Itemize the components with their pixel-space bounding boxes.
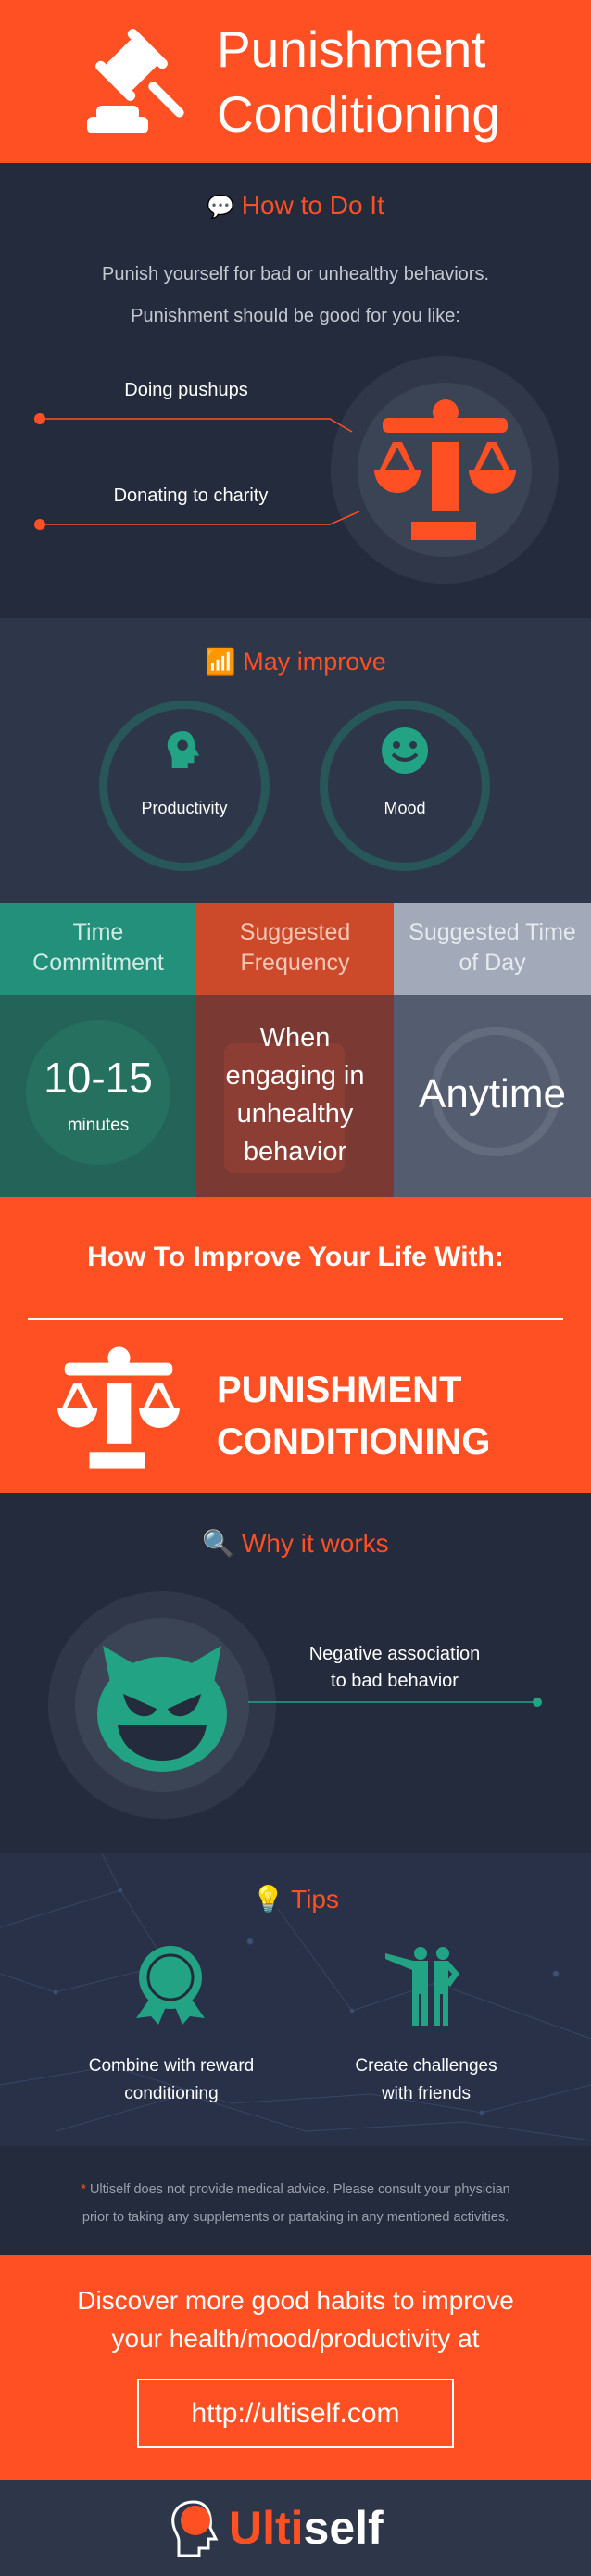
- section: tips: [0, 1853, 591, 2146]
- disclaimer: prior to taking any supplements or partaking in any mentioned activities.: [82, 2210, 509, 2225]
- intro text: Punishment should be good for you like:: [131, 306, 460, 326]
- footer: [0, 2480, 591, 2576]
- column: time commitment: Commitment: [32, 950, 164, 976]
- column: suggested frequency: behavior: [244, 1137, 346, 1167]
- heading: how to do it: 💬 How to Do It: [207, 191, 384, 220]
- column: suggested frequency: When: [260, 1023, 330, 1053]
- logo: [171, 2500, 384, 2557]
- column: time commitment: [0, 903, 196, 1197]
- column: suggested time of day: of Day: [459, 950, 526, 976]
- icon: gavel: [87, 29, 184, 133]
- logo: Ultiself: [229, 2502, 384, 2554]
- column: time commitment: minutes: [68, 1116, 129, 1135]
- title: Punishment: [217, 20, 485, 78]
- heading: may improve: 📶 May improve: [205, 648, 386, 676]
- item: doing pushups: Doing pushups: [124, 380, 248, 400]
- tip: reward: Combine with reward: [89, 2056, 254, 2076]
- item: doing pushups: [34, 380, 352, 433]
- item: mood: Mood: [384, 799, 426, 817]
- banner: how to improve: PUNISHMENT: [217, 1370, 461, 1410]
- icon: scale white: [57, 1346, 180, 1469]
- section: may improve: [0, 618, 591, 903]
- item: productivity: Productivity: [141, 799, 228, 817]
- column: suggested time of day: Suggested Time: [409, 919, 576, 945]
- table: stats: [0, 903, 591, 1197]
- column: suggested time of day: [394, 903, 591, 1197]
- section: why it works: [0, 1493, 591, 1853]
- column: suggested time of day: Anytime: [419, 1071, 566, 1117]
- cta: [0, 2255, 591, 2480]
- column: time commitment: 10-15: [44, 1054, 153, 1102]
- column: suggested frequency: engaging in: [226, 1061, 364, 1091]
- tip: reward: [89, 1946, 254, 2103]
- intro text: [102, 264, 489, 326]
- item: donating to charity: Donating to charity: [114, 486, 268, 506]
- section: how to do it: [0, 163, 591, 618]
- title: [217, 20, 500, 143]
- disclaimer: [0, 2146, 591, 2255]
- column: time commitment: Time: [73, 919, 123, 945]
- callout: negative association: Negative association: [309, 1644, 480, 1664]
- column: suggested frequency: [196, 903, 394, 1197]
- column: suggested frequency: Frequency: [240, 950, 350, 976]
- disclaimer: * Ultiself does not provide medical advice. Please consult your physician: [81, 2182, 510, 2197]
- icon: scale: [374, 399, 516, 540]
- column: suggested frequency: Suggested: [240, 919, 350, 945]
- scale circle: [331, 356, 559, 584]
- item: donating to charity: [34, 486, 359, 530]
- tip: reward: conditioning: [124, 2084, 219, 2103]
- tip: challenges: with friends: [382, 2084, 471, 2103]
- banner: how to improve: How To Improve Your Life With:: [87, 1242, 504, 1272]
- intro text: Punish yourself for bad or unhealthy behaviors.: [102, 264, 489, 284]
- url box: http://ultiself.com: [191, 2398, 400, 2429]
- banner: how to improve: CONDITIONING: [217, 1421, 491, 1462]
- icon: devil face: [48, 1591, 276, 1819]
- column: suggested frequency: unhealthy: [237, 1099, 353, 1129]
- cta: Discover more good habits to improve: [77, 2286, 514, 2315]
- item: productivity: [99, 701, 270, 871]
- tip: challenges: Create challenges: [355, 2056, 497, 2076]
- header: [0, 0, 591, 163]
- callout: negative association: [248, 1644, 542, 1707]
- heading: tips: 💡 Tips: [252, 1885, 339, 1913]
- tip: challenges: [355, 1947, 497, 2103]
- heading: why it works: 🔍 Why it works: [202, 1529, 389, 1558]
- title: Conditioning: [217, 85, 500, 143]
- url box: [137, 2379, 454, 2448]
- banner: how to improve: [0, 1197, 591, 1493]
- callout: negative association: to bad behavior: [331, 1671, 459, 1691]
- cta: your health/mood/productivity at: [112, 2324, 479, 2353]
- item: mood: [320, 701, 490, 871]
